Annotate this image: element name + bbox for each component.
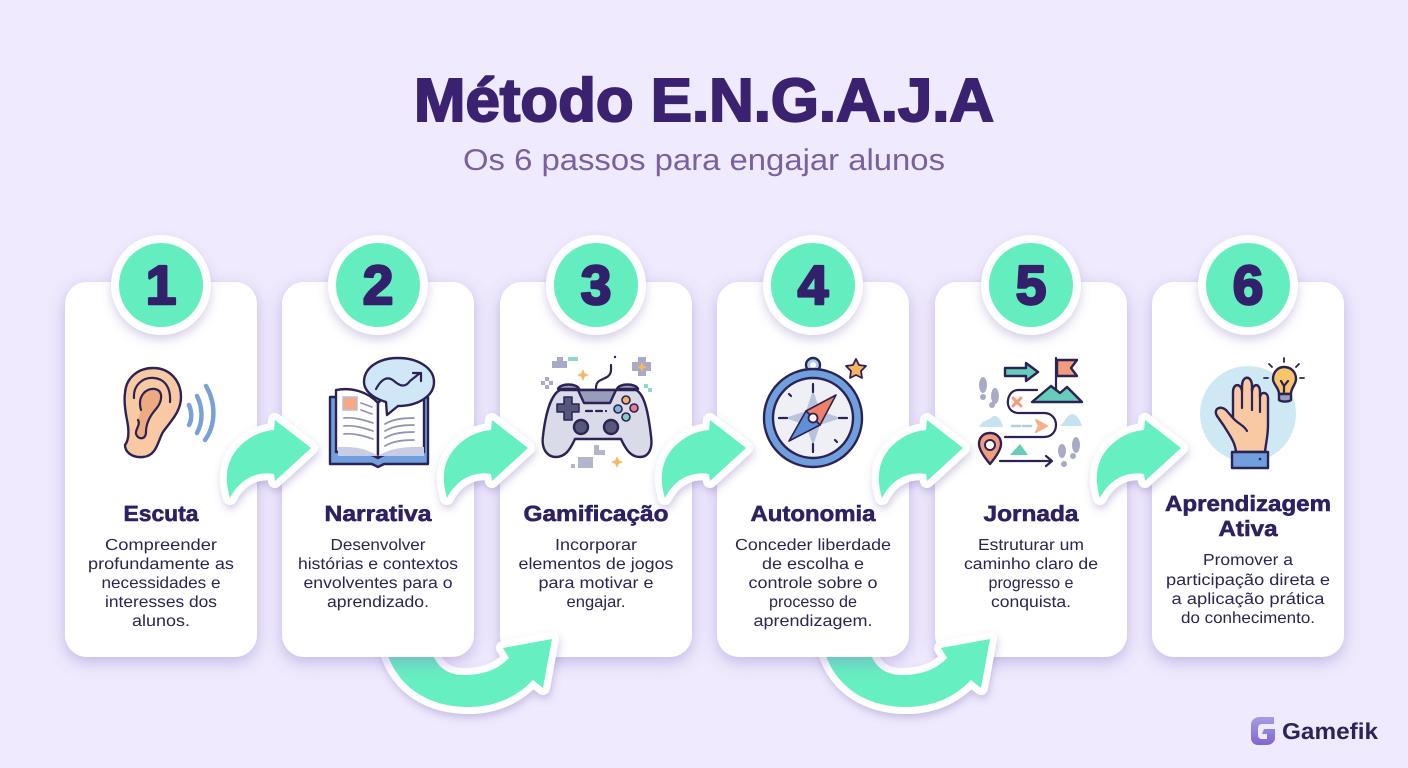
panel: step 6 Aprendizagem Ativa: [1152, 235, 1344, 657]
number badge 5: [981, 235, 1081, 335]
heading: Aprendizagem Ativa: Ativa: [1218, 516, 1278, 541]
number badge 6: 6: [1233, 254, 1263, 316]
number badge 6: [1198, 235, 1298, 335]
description: Autonomia: controle sobre o: [748, 575, 878, 592]
description: Escuta: alunos.: [132, 613, 190, 630]
description: Jornada: progresso e: [988, 575, 1074, 592]
description: Autonomia: processo de: [769, 594, 857, 611]
description: Jornada: [964, 537, 1098, 611]
description: Narrativa: histórias e contextos: [298, 556, 458, 573]
arrow: step 3 to step 4: [662, 420, 746, 498]
number badge 5: 5: [1016, 254, 1046, 316]
description: Aprendizagem Ativa: participação direta e: [1166, 572, 1330, 589]
heading: Autonomia: Autonomia: [750, 501, 876, 526]
heading: Gamificação: Gamificação: [524, 501, 668, 526]
description: Narrativa: Desenvolver: [330, 537, 426, 554]
description: Gamificação: engajar.: [566, 594, 626, 611]
arrow: step 1 to step 2: [227, 420, 311, 498]
heading: Jornada: Jornada: [984, 501, 1079, 526]
number badge 1: [111, 235, 211, 335]
number badge 2: [328, 235, 428, 335]
number badge 4: 4: [798, 254, 829, 316]
description: Escuta: Compreender: [105, 537, 218, 554]
description: Escuta: profundamente as: [88, 556, 234, 573]
description: Autonomia: [735, 537, 891, 630]
heading: Escuta: Escuta: [124, 501, 199, 526]
description: Aprendizagem Ativa: a aplicação prática: [1172, 591, 1325, 608]
number badge 3: 3: [581, 254, 611, 316]
description: Aprendizagem Ativa: [1166, 552, 1330, 627]
arrow: bottom curved arrow from step 4 to step 5: [824, 639, 990, 707]
description: Gamificação: para motivar e: [538, 575, 654, 592]
panel: step 1 Escuta: [65, 235, 257, 657]
title: Método E.N.G.A.J.A: [414, 66, 994, 134]
arrow: step 2 to step 3: [444, 420, 528, 498]
number badge 1: 1: [146, 254, 176, 316]
icon: open book with speech bubble: [330, 358, 434, 467]
description: Narrativa: aprendizado.: [327, 594, 429, 611]
description: Escuta: necessidades e: [102, 575, 221, 592]
description: Narrativa: envolventes para o: [304, 575, 453, 592]
icon: ear with sound waves: [125, 368, 213, 457]
subtitle: Os 6 passos para engajar alunos: [463, 144, 945, 177]
description: Escuta: interesses dos: [105, 594, 217, 611]
description: Autonomia: Conceder liberdade: [735, 537, 891, 554]
heading: Narrativa: Narrativa: [324, 501, 432, 526]
heading: Aprendizagem Ativa: [1165, 491, 1331, 541]
arrow: step 4 to step 5: [879, 420, 963, 498]
icon: logo G mark: [1251, 717, 1275, 745]
icon: game controller: [541, 356, 652, 468]
description: Autonomia: de escolha e: [762, 556, 864, 573]
panel: step 3 Gamificação: [500, 235, 692, 657]
panel: step 4 Autonomia: [717, 235, 909, 657]
arrow: step 5 to step 6: [1097, 420, 1181, 498]
description: Jornada: conquista.: [991, 594, 1071, 611]
number badge 2: 2: [363, 254, 393, 316]
description: Aprendizagem Ativa: do conhecimento.: [1181, 610, 1315, 627]
panel: step 2 Narrativa: [282, 235, 474, 657]
panel: step 5 Jornada: [935, 235, 1127, 657]
icon: journey map: [979, 358, 1082, 467]
heading: Aprendizagem Ativa: Aprendizagem: [1165, 491, 1331, 516]
description: Gamificação: Incorporar: [555, 537, 638, 554]
arrow: bottom curved arrow from step 2 to step 3: [386, 639, 552, 707]
number badge 4: [763, 235, 863, 335]
icon: raised hand with light bulb: [1200, 358, 1304, 468]
description: Jornada: caminho claro de: [964, 556, 1098, 573]
description: Escuta: [88, 537, 234, 630]
number badge 3: [546, 235, 646, 335]
description: Autonomia: aprendizagem.: [754, 613, 872, 630]
logo: Gamefik: [1251, 717, 1378, 745]
description: Gamificação: elementos de jogos: [518, 556, 674, 573]
wordmark: Gamefik: [1282, 718, 1378, 744]
description: Jornada: Estruturar um: [978, 537, 1084, 554]
description: Aprendizagem Ativa: Promover a: [1203, 552, 1293, 569]
icon: compass with star: [764, 358, 866, 467]
description: Gamificação: [518, 537, 674, 611]
description: Narrativa: [298, 537, 458, 611]
